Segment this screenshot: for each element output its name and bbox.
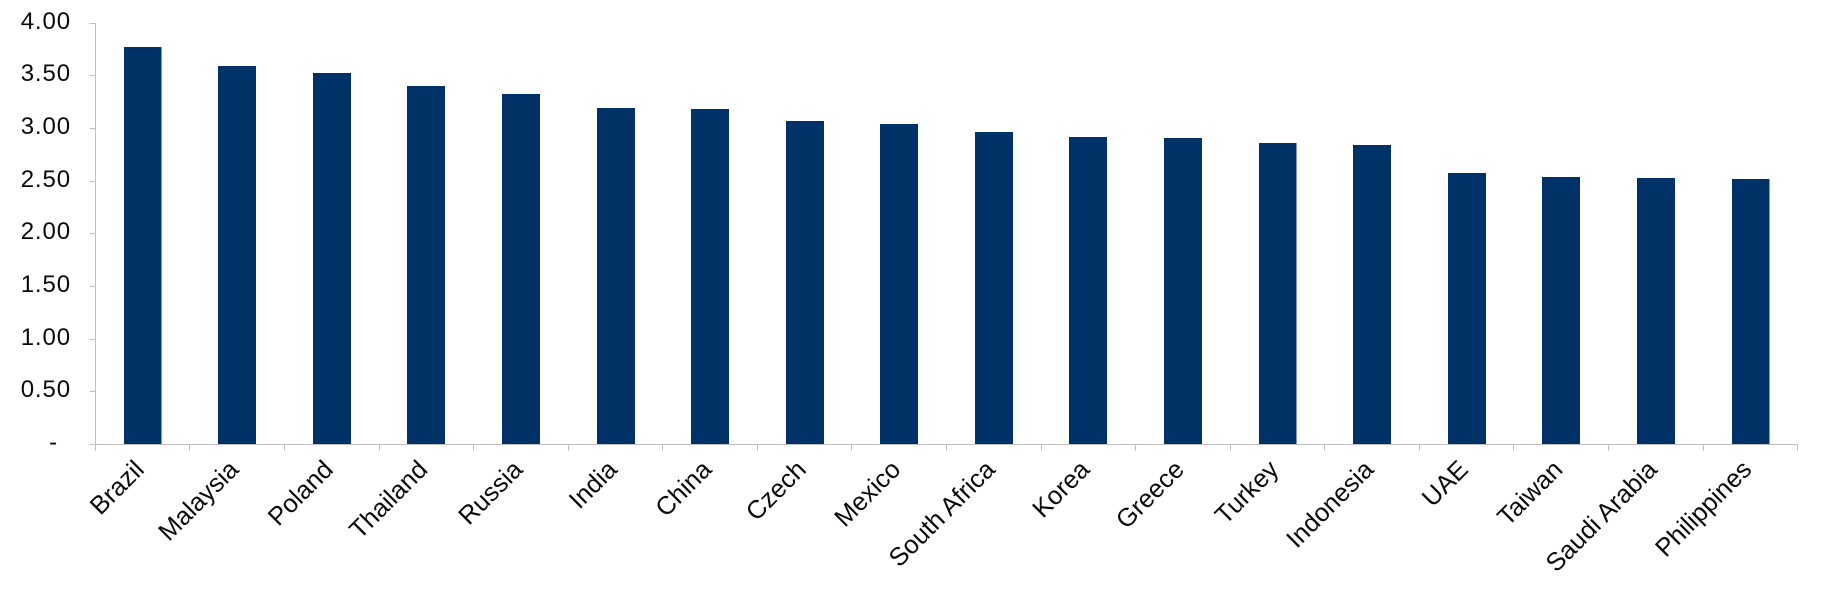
x axis country labels: Poland [263,455,339,531]
bar: Greece [1164,138,1202,444]
x axis country labels: Korea [1027,455,1096,523]
x axis country labels: Indonesia [1281,455,1380,553]
y axis labels: 2.00 [21,218,71,245]
y axis labels: 1.00 [21,324,71,351]
x axis country labels: Philippines [1650,455,1757,562]
bar: Taiwan [1542,177,1580,444]
bar: Mexico [880,124,918,444]
x axis country labels: Thailand [344,455,433,544]
y axis labels: 1.50 [21,271,71,298]
x axis country labels: Taiwan [1492,455,1568,531]
x axis country labels: Czech [741,455,812,526]
x axis country labels [85,455,1757,577]
x axis country labels: Mexico [829,455,906,532]
bar: Malaysia [218,66,256,444]
bar: Thailand [407,86,445,444]
bar: Indonesia [1353,145,1391,444]
bar: India [597,108,635,444]
x axis country labels: Saudi Arabia [1541,455,1663,577]
x axis country labels: UAE [1417,455,1474,512]
y axis labels: 3.00 [21,113,71,140]
x axis country labels: Russia [453,455,529,530]
x axis country labels: India [564,455,623,514]
bar: Philippines [1732,179,1770,444]
bar: Saudi Arabia [1637,178,1675,444]
bar: Korea [1069,137,1107,444]
bar: Czech [786,121,824,444]
bar: UAE [1448,173,1486,444]
x axis country labels: Turkey [1210,455,1284,530]
x axis country labels: Greece [1111,455,1190,534]
bar: Russia [502,94,540,444]
bar: Turkey [1259,143,1296,444]
bar: Brazil [124,47,162,444]
bar: South Africa [975,132,1013,444]
bar: Poland [313,73,351,444]
bars [124,47,1770,444]
y axis labels [21,8,71,456]
axes and tick marks [90,24,1798,450]
y axis labels: 2.50 [21,166,71,193]
y axis labels: - [49,429,58,456]
y axis labels: 3.50 [21,60,71,87]
bar: China [691,109,729,444]
y axis labels: 4.00 [21,8,71,35]
x axis country labels: South Africa [884,455,1001,572]
x axis country labels: Brazil [85,455,150,520]
x axis country labels: China [650,455,718,522]
x axis country labels: Malaysia [153,455,245,546]
y axis labels: 0.50 [21,376,71,403]
